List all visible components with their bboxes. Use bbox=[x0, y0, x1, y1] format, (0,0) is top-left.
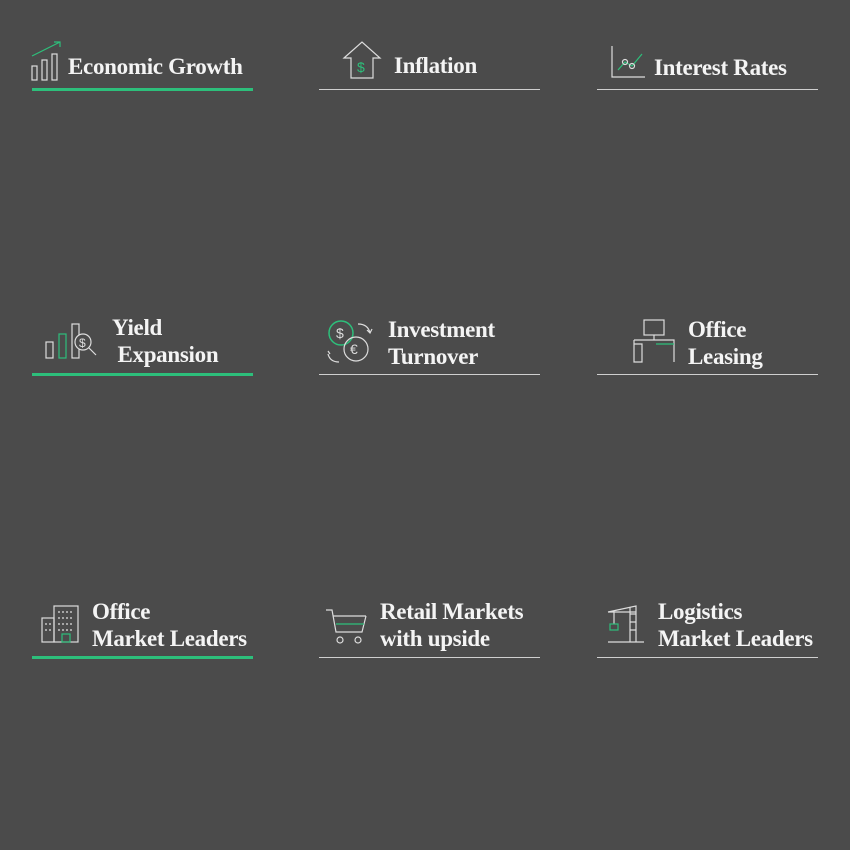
heading: Turnover bbox=[388, 344, 478, 369]
heading: Investment bbox=[388, 317, 495, 342]
panel: logistics market leaders bbox=[608, 599, 813, 651]
divider: green bbox=[32, 88, 253, 91]
heading: Economic Growth bbox=[68, 54, 243, 79]
panel: economic growth bbox=[31, 41, 243, 81]
heading: Expansion bbox=[117, 342, 218, 367]
heading: Retail Markets bbox=[380, 599, 523, 624]
icon: house dollar: $ bbox=[357, 59, 365, 75]
panel: investment turnover bbox=[328, 317, 496, 369]
icon: currency exchange: € bbox=[350, 341, 358, 357]
icon: crane warehouse bbox=[608, 605, 644, 643]
heading: Interest Rates bbox=[654, 55, 787, 80]
heading: Yield bbox=[112, 315, 162, 340]
heading bbox=[658, 599, 813, 651]
icon: currency exchange: $ bbox=[336, 325, 344, 341]
heading bbox=[388, 317, 496, 369]
heading: Market Leaders bbox=[92, 626, 247, 651]
heading: Leasing bbox=[688, 344, 763, 369]
heading: with upside bbox=[380, 626, 490, 651]
heading: Market Leaders bbox=[658, 626, 813, 651]
icon: shopping cart bbox=[326, 609, 366, 644]
panel: retail markets bbox=[326, 599, 523, 651]
icon: currency exchange bbox=[328, 320, 372, 363]
heading bbox=[380, 599, 523, 651]
heading: Office bbox=[92, 599, 150, 624]
panel: inflation bbox=[342, 41, 477, 79]
heading bbox=[92, 599, 247, 651]
icon: bars magnifier bbox=[45, 323, 96, 359]
heading bbox=[112, 315, 218, 367]
icon: desk bbox=[633, 319, 675, 363]
panel: office market leaders bbox=[41, 599, 247, 651]
heading bbox=[688, 317, 763, 369]
icon: house dollar bbox=[342, 41, 382, 79]
heading: Office bbox=[688, 317, 746, 342]
panel: interest rates bbox=[611, 46, 787, 80]
panel: yield expansion bbox=[45, 315, 218, 367]
panel: office leasing bbox=[633, 317, 763, 369]
icon: bar chart growth bbox=[31, 41, 61, 81]
icon: line chart bbox=[611, 46, 645, 78]
icon: bars magnifier: $ bbox=[79, 336, 86, 350]
heading: Logistics bbox=[658, 599, 742, 624]
heading: Inflation bbox=[394, 53, 477, 78]
icon: office building bbox=[41, 605, 79, 643]
